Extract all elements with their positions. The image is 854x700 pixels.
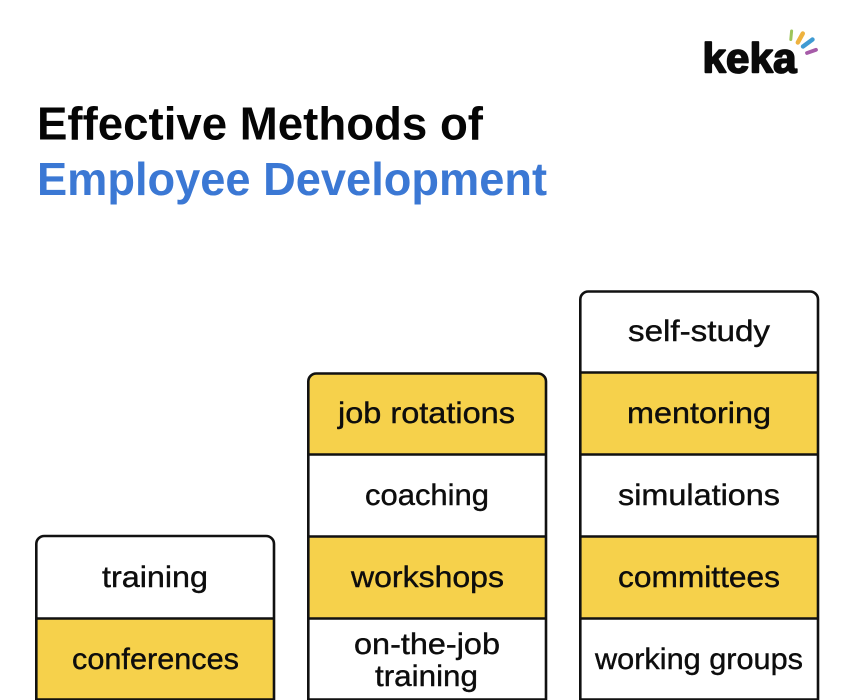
row: on-the-job training: training: [375, 660, 478, 693]
row: conferences: conferences: [72, 643, 239, 676]
row: working groups: [580, 618, 818, 700]
row: mentoring: mentoring: [627, 397, 771, 430]
row: job rotations: job rotations: [337, 397, 515, 430]
row: coaching: [308, 454, 546, 536]
title line 2: Employee Development: [37, 153, 547, 205]
row: simulations: [580, 454, 818, 536]
column 3 stack: [580, 292, 818, 700]
logo rays: [791, 31, 816, 53]
row: on-the-job training: on-the-job: [354, 628, 500, 661]
row: workshops: workshops: [350, 561, 504, 594]
column 2 stack: [308, 374, 546, 700]
row: simulations: simulations: [618, 479, 780, 512]
row: committees: committees: [618, 561, 780, 594]
row: committees: [580, 536, 818, 618]
row: training: training: [102, 561, 208, 594]
row: on-the-job training: [308, 618, 546, 700]
row: mentoring: [580, 372, 818, 454]
column 1 stack: [36, 536, 274, 700]
row: self-study: [580, 292, 818, 372]
row: workshops: [308, 536, 546, 618]
logo: keka: [702, 31, 816, 82]
row: conferences: [36, 618, 274, 700]
row: self-study: self-study: [628, 315, 770, 348]
row: training: [36, 536, 274, 618]
title line 1: Effective Methods of: [37, 98, 484, 150]
row: coaching: coaching: [365, 479, 489, 512]
row: working groups: working groups: [594, 643, 803, 676]
row: job rotations: [308, 374, 546, 454]
title: [37, 98, 547, 205]
logo wordmark: keka: [702, 34, 797, 82]
